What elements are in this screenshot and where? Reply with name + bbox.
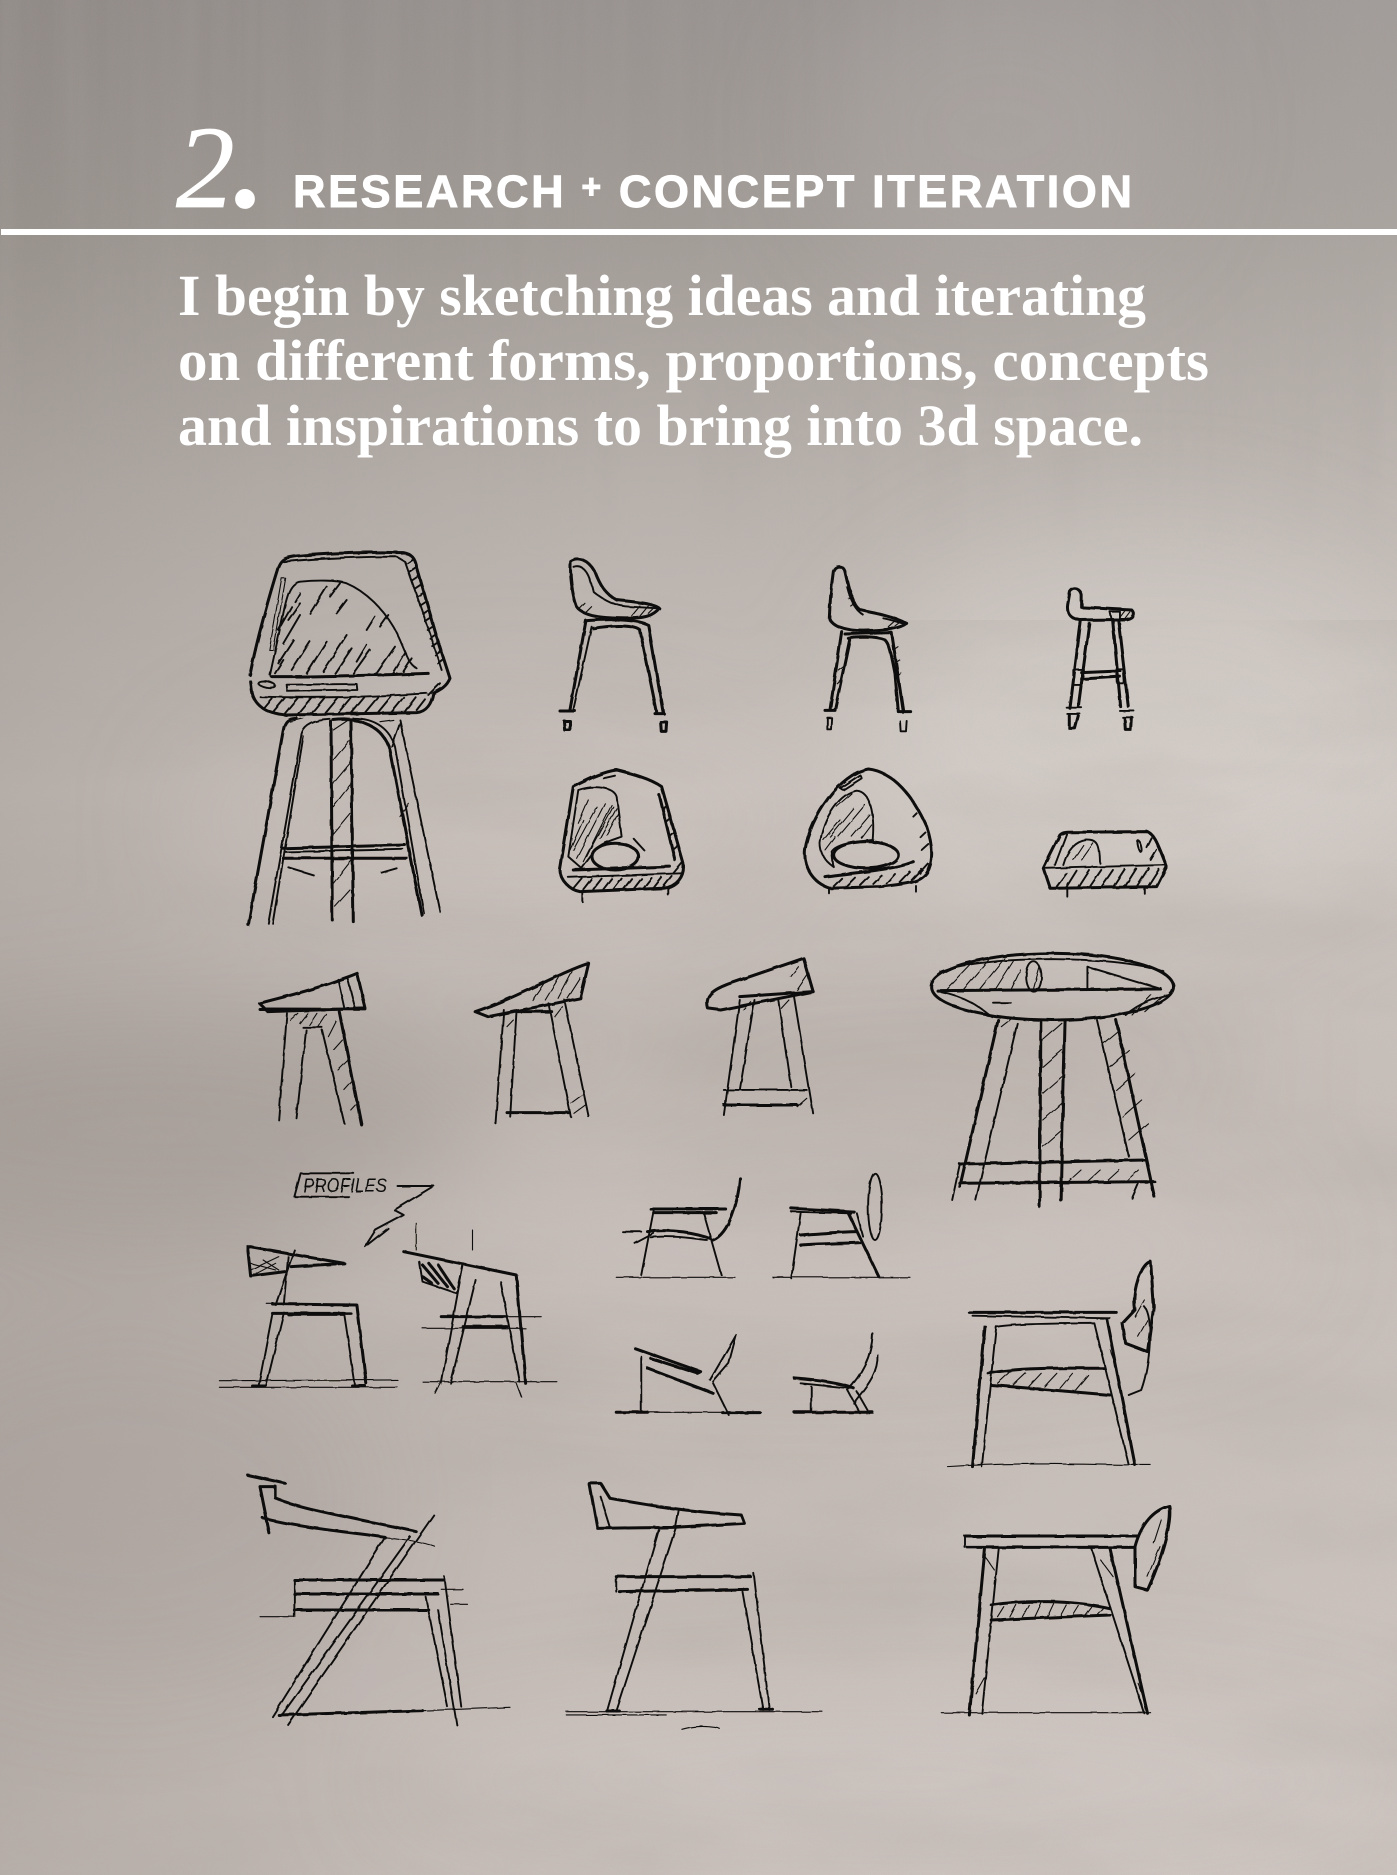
sketch: large chair with panel back (941, 1506, 1170, 1715)
sketch: front view rounded pod chair (805, 769, 932, 893)
sketch: wedge seat stool one (260, 973, 365, 1125)
heading: RESEARCH (293, 166, 564, 217)
sketch: large chair with straight leg (566, 1483, 822, 1729)
sketch: reclined lounge chair (616, 1335, 760, 1415)
sketch: side view bar stool small (1067, 589, 1134, 729)
sketch: medium dining chair with oval back (948, 1262, 1154, 1467)
sketch: handwritten profiles label with arrow: PROFILES (303, 1176, 387, 1197)
intro paragraph: I begin by sketching ideas and iterating (178, 263, 1146, 328)
heading: CONCEPT ITERATION (604, 166, 1132, 217)
sketch: side view shell chair one (560, 559, 667, 731)
sketches: all chair drawings (219, 552, 1174, 1729)
sketch: handwritten profiles label with arrow (294, 1173, 434, 1247)
sketch: small chair with upright back (616, 1178, 740, 1277)
sketch: large chair with crossing leg (248, 1475, 510, 1725)
heading: + (581, 168, 601, 206)
sketch: minimal side chair (794, 1333, 878, 1413)
sketch: wedge seat stool three (707, 958, 813, 1115)
sketch: armchair profile one (219, 1247, 398, 1387)
sketch: large front-view bar stool (248, 552, 450, 925)
sketch: side view shell chair two (825, 567, 911, 731)
intro paragraph (178, 263, 1209, 458)
section number: 2. (176, 102, 264, 233)
sketch: wedge seat stool two (475, 963, 589, 1123)
sketch: round top stool with stretchers (931, 953, 1174, 1207)
intro paragraph: on different forms, proportions, concepts (178, 328, 1209, 393)
sketch: small chair with oval back (772, 1173, 910, 1278)
sketch: front view shell chair one (560, 770, 683, 902)
header rule (1, 229, 1397, 235)
intro paragraph: and inspirations to bring into 3d space. (178, 393, 1143, 458)
sketch: low wide lounge seat (1043, 832, 1167, 897)
sketch: armchair profile two (404, 1223, 557, 1397)
